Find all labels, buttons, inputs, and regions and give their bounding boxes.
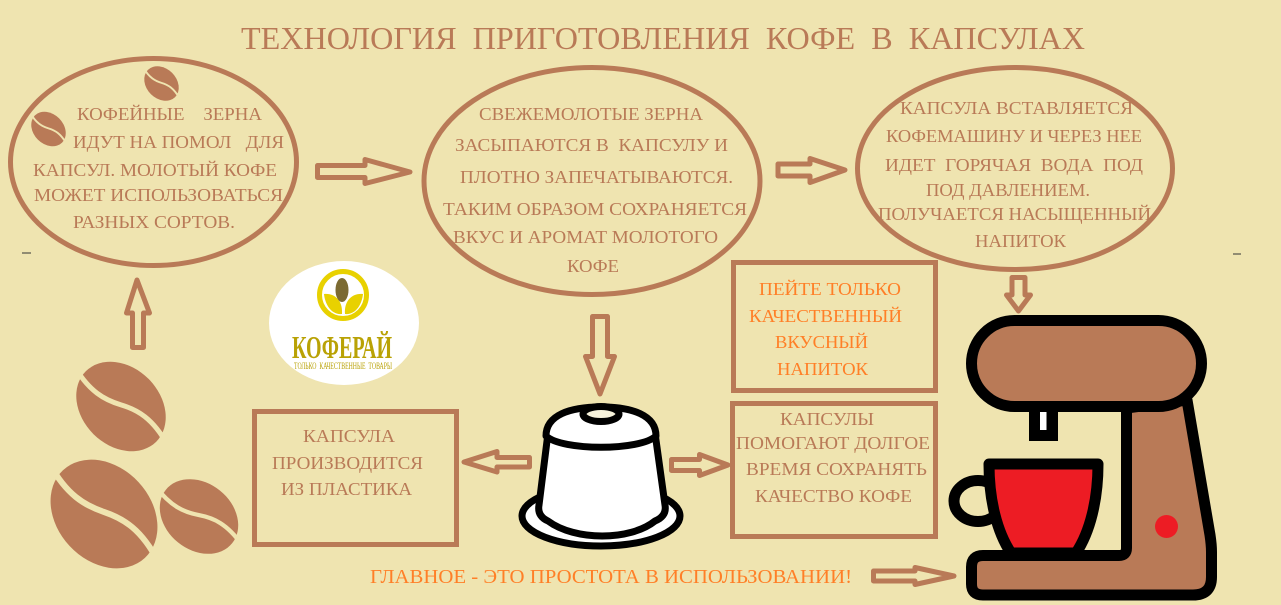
panel: step 3 brewing [858, 68, 1172, 270]
arrow: bottom line to machine [874, 568, 954, 584]
box text: КАЧЕСТВЕННЫЙ [749, 306, 902, 326]
icon: coffee machine [954, 320, 1212, 595]
box text: ВРЕМЯ СОХРАНЯТЬ [746, 459, 927, 479]
arrow: capsule to quality box [672, 454, 728, 476]
box text [736, 409, 930, 506]
coffee bean small [140, 457, 258, 576]
icon: small coffee bean top [137, 59, 186, 108]
step 1 text: КОФЕЙНЫЕ ЗЕРНА [77, 104, 262, 124]
logo ring [320, 272, 366, 318]
icon: coffee capsule [522, 406, 680, 546]
step 1 text: РАЗНЫХ СОРТОВ. [73, 212, 235, 232]
step 3 text: НАПИТОК [975, 231, 1067, 251]
arrow: capsule to plastic box [464, 452, 530, 472]
oval outline step 3 [858, 68, 1172, 270]
arrow: beans up to step 1 [126, 280, 150, 348]
step 1 text: КАПСУЛ. МОЛОТЫЙ КОФЕ [33, 160, 277, 180]
step 1 text [33, 104, 284, 232]
step 2 text: ТАКИМ ОБРАЗОМ СОХРАНЯЕТСЯ [443, 199, 747, 219]
icon: small coffee bean left [24, 105, 73, 153]
nozzle opening [1040, 412, 1046, 430]
coffee bean upper [58, 344, 184, 469]
step 2 text: ПЛОТНО ЗАПЕЧАТЫВАЮТСЯ. [460, 167, 733, 187]
box: capsule made of plastic [254, 412, 456, 544]
logo tagline: ТОЛЬКО КАЧЕСТВЕННЫЕ ТОВАРЫ [294, 361, 392, 371]
step 2 text: КОФЕ [567, 256, 619, 276]
arrow: step 3 down to machine [1006, 278, 1030, 311]
step 2 text [443, 104, 747, 276]
step 3 text: ПОЛУЧАЕТСЯ НАСЫЩЕННЫЙ [878, 204, 1151, 224]
step 3 text: КОФЕМАШИНУ И ЧЕРЕЗ НЕЕ [886, 126, 1142, 146]
logo bean [336, 278, 348, 302]
box text: ПЕЙТЕ ТОЛЬКО [759, 279, 901, 299]
step 2 text: ВКУС И АРОМАТ МОЛОТОГО [453, 227, 718, 247]
logo background [269, 261, 419, 385]
box text: ВКУСНЫЙ [775, 332, 868, 352]
title: ТЕХНОЛОГИЯ ПРИГОТОВЛЕНИЯ КОФЕ В КАПСУЛАХ [241, 20, 1085, 56]
machine head [972, 320, 1202, 406]
box text [749, 279, 902, 379]
box text: КАЧЕСТВО КОФЕ [755, 486, 912, 506]
oval outline step 1 [10, 58, 296, 266]
step 3 text: ИДЕТ ГОРЯЧАЯ ВОДА ПОД [885, 155, 1143, 175]
box frame [734, 262, 936, 390]
step 1 text: МОЖЕТ ИСПОЛЬЗОВАТЬСЯ [34, 185, 283, 205]
arrow: step 1 to step 2 [318, 160, 410, 184]
bottom message: ГЛАВНОЕ - ЭТО ПРОСТОТА В ИСПОЛЬЗОВАНИИ! [370, 566, 852, 588]
arrow: step 2 to step 3 [778, 158, 845, 182]
step 2 text: СВЕЖЕМОЛОТЫЕ ЗЕРНА [479, 104, 703, 124]
cup handle [954, 480, 1002, 522]
logo wordmark: КОФЕРАЙ [292, 329, 392, 365]
capsule top button [583, 406, 619, 422]
step 3 text: ПОД ДАВЛЕНИЕМ. [926, 180, 1090, 200]
icon: coffee beans group [26, 344, 258, 592]
box text: НАПИТОК [777, 359, 869, 379]
box frame [732, 404, 936, 536]
step 2 text: ЗАСЫПАЮТСЯ В КАПСУЛУ И [455, 135, 728, 155]
panel: step 2 filling [424, 68, 760, 294]
cup with coffee [989, 464, 1098, 553]
box text: ПОМОГАЮТ ДОЛГОЕ [736, 433, 930, 453]
box frame [254, 412, 456, 544]
logo leaves [324, 294, 363, 314]
step 1 text: ИДУТ НА ПОМОЛ ДЛЯ [73, 132, 284, 152]
box: drink quality coffee [734, 262, 936, 390]
step 3 text: КАПСУЛА ВСТАВЛЯЕТСЯ [900, 98, 1133, 118]
capsule flange [522, 486, 680, 546]
panel: step 1 grinding [10, 58, 296, 266]
box text: ПРОИЗВОДИТСЯ [272, 453, 423, 473]
box text: КАПСУЛА [303, 426, 395, 446]
machine button [1155, 515, 1178, 538]
arrow: step 2 down to capsule [586, 316, 614, 394]
oval outline step 2 [424, 68, 760, 294]
machine nozzle [1029, 408, 1058, 441]
capsule body [539, 433, 665, 536]
box: capsules preserve quality [732, 404, 936, 536]
box text [272, 426, 423, 499]
box text: КАПСУЛЫ [780, 409, 874, 429]
capsule lid [546, 407, 656, 447]
step 3 text [878, 98, 1151, 251]
machine body and base [972, 400, 1212, 595]
box text: ИЗ ПЛАСТИКА [281, 479, 412, 499]
coffee bean large [26, 436, 182, 592]
logo: Коферай [269, 261, 419, 385]
